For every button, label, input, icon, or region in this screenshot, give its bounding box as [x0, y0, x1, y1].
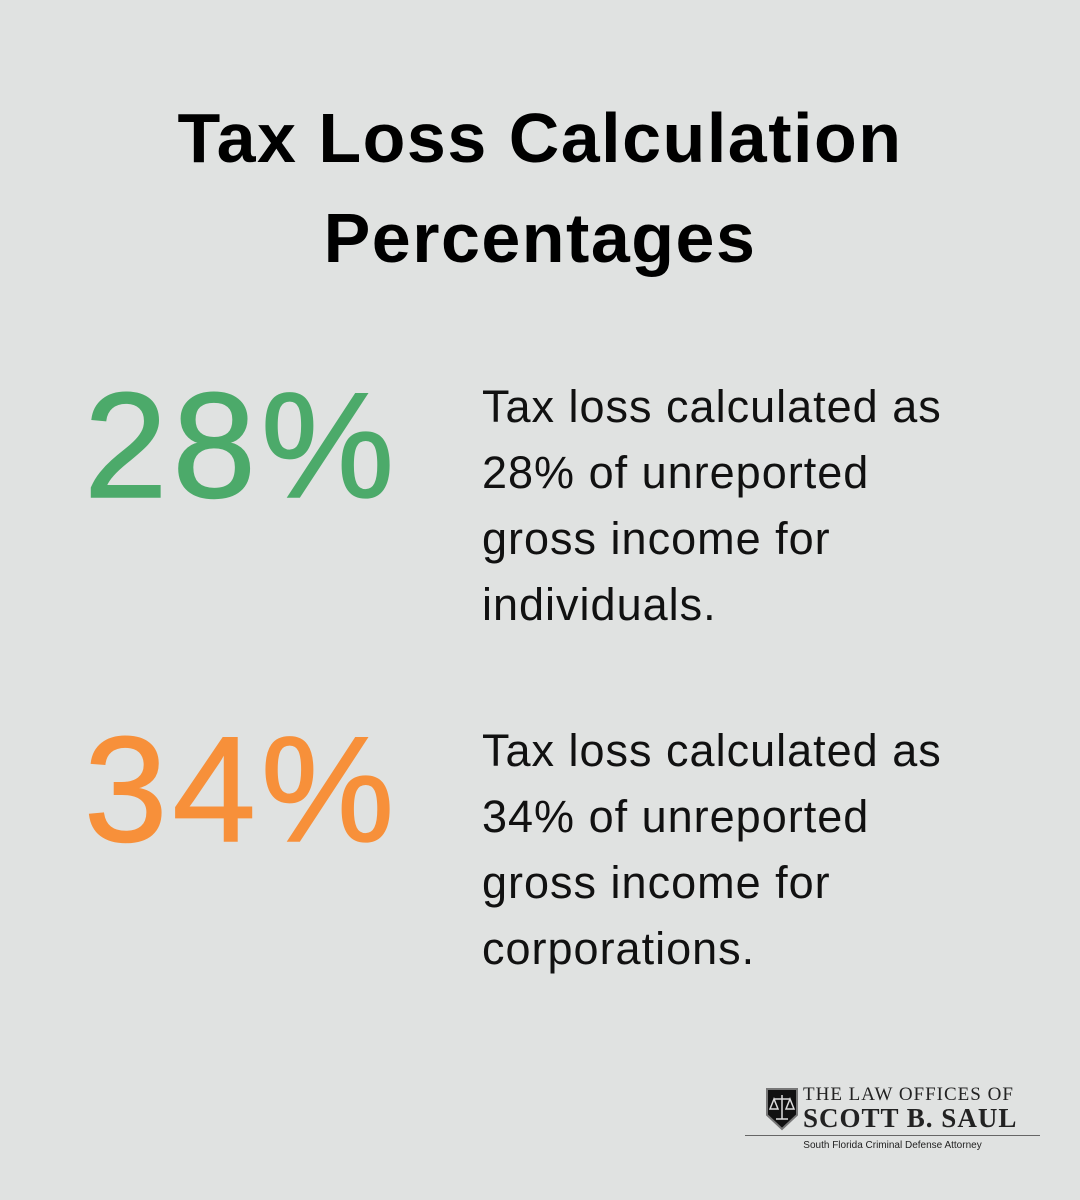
text: corporations: corporations. — [482, 923, 755, 974]
text: corporations: Tax loss calculated as — [482, 725, 942, 776]
text: individuals: individuals. — [482, 579, 717, 630]
text: individuals — [482, 381, 942, 630]
stat: 28%: 28% — [84, 361, 399, 529]
text: corporations — [482, 725, 942, 974]
logo text: THE LAW OFFICES OF — [803, 1084, 1014, 1105]
logo text: SCOTT B. SAUL — [803, 1103, 1017, 1133]
logo — [745, 1084, 1040, 1151]
text: corporations: 34% of unreported — [482, 791, 869, 842]
title — [178, 99, 902, 277]
logo text — [803, 1084, 1017, 1133]
text: corporations: gross income for — [482, 857, 831, 908]
text: individuals: 28% of unreported — [482, 447, 869, 498]
stat: 34%: 34% — [84, 705, 399, 873]
text: individuals: Tax loss calculated as — [482, 381, 942, 432]
title: Percentages — [324, 199, 756, 277]
icon: shield with scales — [766, 1088, 798, 1130]
logo: South Florida Criminal Defense Attorney — [803, 1140, 982, 1151]
text: individuals: gross income for — [482, 513, 831, 564]
title: Tax Loss Calculation — [178, 99, 902, 177]
